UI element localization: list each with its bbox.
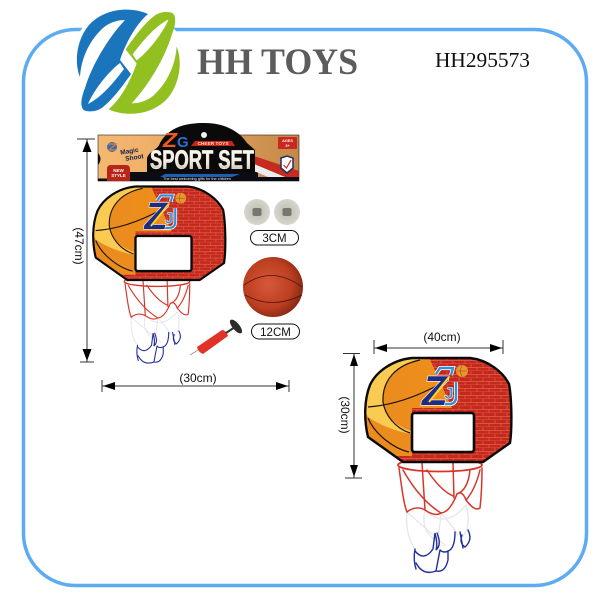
large backboard: [360, 355, 515, 465]
label: 3CM: [250, 230, 298, 245]
dimension: 47cm: (47cm): [72, 227, 86, 265]
logo: HH globe mark: [71, 5, 185, 119]
title: sport set: SPORT SET: [150, 146, 254, 174]
dimension: 30cm height: [338, 354, 362, 478]
age text: AGES: [282, 139, 293, 143]
package header card: [98, 123, 299, 181]
glow strip: [160, 174, 240, 177]
dimension: 30cm height: (30cm): [338, 396, 352, 434]
dimension: 30cm width: (30cm): [179, 371, 217, 385]
title ZG: Z: [162, 130, 178, 152]
title: cheer toys: CHEER TOYS: [197, 141, 229, 147]
suction cups: [244, 199, 300, 225]
label: 12CM: 12CM: [260, 327, 291, 339]
dimension: 40cm: (40cm): [423, 330, 461, 344]
large net: [398, 458, 482, 572]
shield: [281, 156, 293, 173]
age text: 3+: [285, 144, 290, 148]
badge: magic shoot: Shoot: [125, 153, 145, 163]
package header card: G: [177, 134, 189, 151]
label: 12CM: [252, 324, 300, 339]
badge text: new style: STYLE: [111, 173, 126, 178]
badge text: new style: NEW: [113, 168, 124, 173]
brand name: HH TOYS: [197, 42, 358, 83]
basketball: [243, 257, 303, 317]
small backboard: [88, 184, 229, 283]
small net: [124, 277, 190, 363]
white dot: [201, 132, 207, 138]
label: 3CM: 3CM: [262, 233, 287, 245]
small logo mark: [107, 142, 117, 152]
air pump: [190, 318, 244, 355]
dimension: 30cm width: [102, 371, 289, 392]
age badge: [278, 137, 297, 149]
dimension: 47cm: [72, 139, 95, 362]
tagline: The best welcoming gifts for the children: [163, 177, 231, 181]
dimension: 40cm: [374, 330, 503, 354]
badge: magic shoot: Magic: [120, 147, 139, 157]
item code: HH295573: [435, 48, 530, 72]
